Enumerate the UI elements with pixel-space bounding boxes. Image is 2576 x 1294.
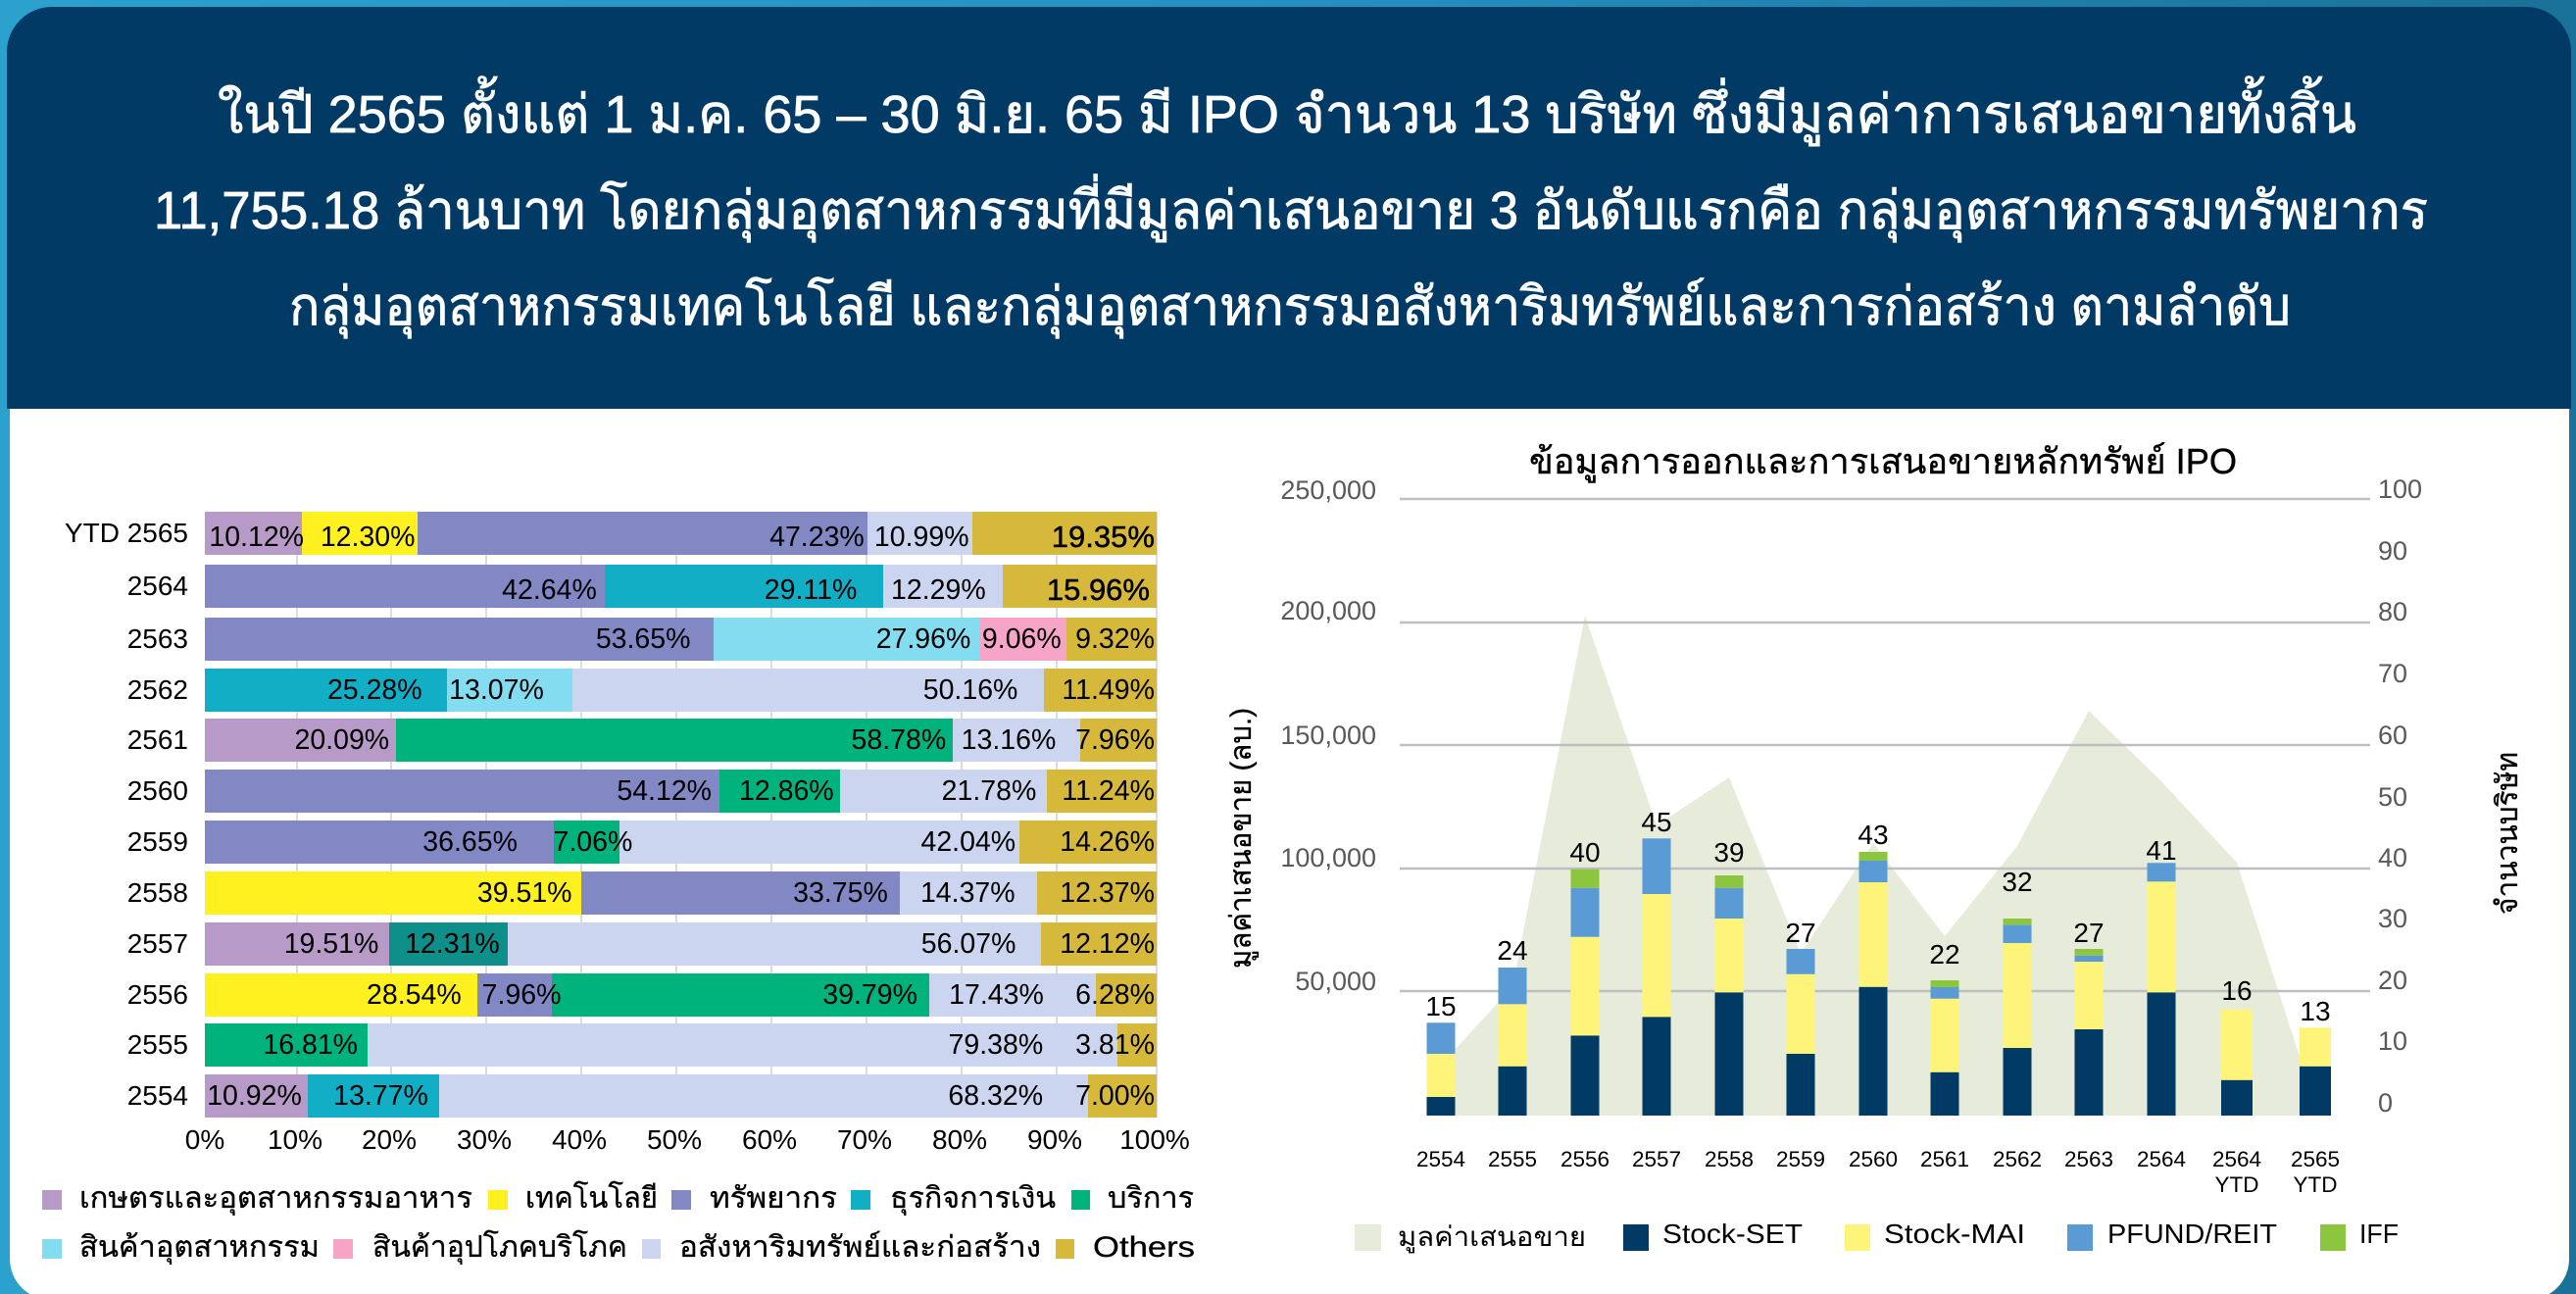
data labels: company counts: 13 xyxy=(2300,996,2331,1026)
legend: industry groups xyxy=(42,1180,1195,1266)
bar row: YTD 2565: 12.30% xyxy=(321,522,415,553)
bar row: 2556 xyxy=(127,973,1157,1017)
left axis: offering value: 100,000 xyxy=(1280,843,1376,872)
x axis: years: 2555 xyxy=(1488,1147,1537,1171)
x axis: years: 2558 xyxy=(1705,1147,1754,1171)
bar row: 2561 xyxy=(127,719,1157,762)
legend: industry groups: สินค้าอุตสาหกรรม xyxy=(79,1231,320,1266)
legend: industry groups: ทรัพยากร xyxy=(710,1182,837,1215)
right axis: number of companies xyxy=(2378,474,2422,1118)
right axis: number of companies: 10 xyxy=(2378,1026,2407,1056)
bar row: 2558 xyxy=(127,871,1157,915)
chart: stacked 100% bars by industry: 2558 xyxy=(127,877,188,908)
bar: 2554 xyxy=(1427,1022,1455,1116)
right axis: number of companies: 50 xyxy=(2378,782,2407,812)
right axis: number of companies: 90 xyxy=(2378,536,2407,566)
headline text: กลุ่มอุตสาหกรรมเทคโนโลยี และกลุ่มอุตสาหกรรมอสังหาริมทรัพย์และการก่อสร้าง ตามลำดับ xyxy=(289,276,2291,339)
data labels: company counts: 41 xyxy=(2146,835,2177,866)
bar row: 2558: 39.51% xyxy=(477,877,572,909)
x axis: percent ticks: 100% xyxy=(1119,1124,1190,1155)
bar row: YTD 2565: 19.35% xyxy=(1052,520,1155,554)
x axis: years: 2560 xyxy=(1849,1147,1898,1171)
chart: stacked 100% bars by industry: YTD 2565 xyxy=(65,518,188,548)
bar: 2559 xyxy=(1786,949,1815,1116)
chart: stacked 100% bars by industry: 2554 xyxy=(127,1080,188,1111)
x axis: percent ticks: 50% xyxy=(647,1124,702,1155)
bar row: 2564 xyxy=(127,565,1157,608)
bar row: 2558: 14.37% xyxy=(920,877,1016,909)
bar row: 2556: 28.54% xyxy=(367,979,462,1011)
left axis: offering value: 200,000 xyxy=(1280,596,1376,625)
bar row: 2563: 53.65% xyxy=(596,623,690,655)
data labels: company counts: 45 xyxy=(1641,807,1672,837)
left axis: offering value xyxy=(1280,475,1376,996)
legend: security types: Stock-SET xyxy=(1662,1219,1803,1249)
bar row: 2560: 11.24% xyxy=(1062,775,1155,807)
data labels: company counts: 43 xyxy=(1858,820,1889,850)
x axis: percent ticks: 80% xyxy=(932,1124,987,1155)
x axis: years: 2561 xyxy=(1920,1147,1969,1171)
bar row: 2558: 12.37% xyxy=(1060,877,1155,909)
right axis: number of companies: 40 xyxy=(2378,843,2407,872)
chart: stacked 100% bars by industry: 2559 xyxy=(127,826,188,857)
legend: security types: IFF xyxy=(2359,1219,2399,1249)
bar row: 2560 xyxy=(127,770,1157,813)
legend: industry groups: เทคโนโลยี xyxy=(525,1180,658,1215)
bar row: 2563 xyxy=(127,618,1157,661)
headline text: 11,755.18 ล้านบาท โดยกลุ่มอุตสาหกรรมที่มีมูลค่าเสนอขาย 3 อันดับแรกคือ กลุ่มอุตสาหกรรมทรัพยากร xyxy=(154,174,2428,243)
x axis: years: 2563 xyxy=(2064,1147,2113,1171)
chart: stacked 100% bars by industry: 2557 xyxy=(127,928,188,959)
right axis: number of companies: 80 xyxy=(2378,597,2407,626)
legend: security types: PFUND/REIT xyxy=(2107,1219,2277,1249)
panel: white content card xyxy=(10,294,2569,1294)
bar row: 2560: 54.12% xyxy=(617,775,712,807)
bar: 2564 xyxy=(2147,863,2176,1116)
bar row: 2559: 7.06% xyxy=(554,826,632,858)
data labels: company counts xyxy=(1425,807,2331,1026)
bar row: 2557: 12.31% xyxy=(405,928,500,960)
legend: industry groups: อสังหาริมทรัพย์และก่อสร้าง xyxy=(679,1230,1041,1264)
bar: 2561 xyxy=(1931,980,1958,1116)
bar row: 2562 xyxy=(127,669,1157,712)
x axis: percent ticks: 30% xyxy=(457,1124,512,1155)
bar: 2562 xyxy=(2004,919,2031,1116)
bar row: 2564: 15.96% xyxy=(1047,572,1150,607)
bar row: 2563: 27.96% xyxy=(876,623,970,655)
bar: 2565 YTD xyxy=(2300,1027,2331,1116)
chart: stacked 100% bars by industry: 2555 xyxy=(127,1029,188,1060)
bar row: YTD 2565: 10.99% xyxy=(874,522,969,553)
left axis: offering value: 150,000 xyxy=(1280,721,1376,750)
bar row: 2556: 17.43% xyxy=(949,979,1044,1011)
x axis: years: 2562 xyxy=(1993,1147,2042,1171)
bar: 2556 xyxy=(1570,870,1600,1116)
left axis title: มูลค่าเสนอขาย (ลบ.) xyxy=(1225,708,1259,969)
bar: 2555 xyxy=(1498,968,1527,1116)
bar row: 2560: 12.86% xyxy=(739,775,834,807)
bar row: 2563: 9.32% xyxy=(1075,623,1155,655)
data labels: company counts: 24 xyxy=(1497,935,1528,966)
chart: stacked 100% bars by industry: 2556 xyxy=(127,979,188,1010)
data labels: company counts: 16 xyxy=(2221,975,2253,1006)
bar row: 2559: 36.65% xyxy=(422,826,518,858)
left axis: offering value: 50,000 xyxy=(1295,967,1376,996)
x axis: years: 2564 xyxy=(2212,1147,2261,1171)
area: offering value xyxy=(1441,616,2315,1116)
bar row: 2556: 39.79% xyxy=(822,979,917,1011)
bar row: 2557: 12.12% xyxy=(1060,928,1155,960)
right axis: number of companies: 20 xyxy=(2378,966,2407,995)
x axis: percent ticks: 10% xyxy=(268,1124,322,1155)
bar: 2557 xyxy=(1643,838,1670,1116)
bar row: YTD 2565 xyxy=(65,512,1157,555)
bar row: 2554: 13.77% xyxy=(333,1080,428,1112)
bar row: 2561: 7.96% xyxy=(1075,724,1155,756)
bar row: 2564: 12.29% xyxy=(891,574,986,606)
bar row: 2555: 16.81% xyxy=(263,1029,358,1061)
bar row: 2562: 11.49% xyxy=(1062,674,1155,706)
bar row: 2564: 29.11% xyxy=(765,574,857,606)
data labels: company counts: 27 xyxy=(1785,918,1816,948)
stacked bars: securities by type xyxy=(1427,838,2331,1116)
legend: security types: มูลค่าเสนอขาย xyxy=(1398,1221,1586,1254)
left axis: offering value: 250,000 xyxy=(1280,475,1376,505)
legend: security types: Stock-MAI xyxy=(1884,1219,2025,1249)
bar: 2563 xyxy=(2074,949,2104,1116)
bar row: 2556: 6.28% xyxy=(1075,979,1155,1011)
chart: stacked 100% bars by industry: 2563 xyxy=(127,623,188,654)
x axis: percent ticks: 70% xyxy=(837,1124,892,1155)
x axis: years: 2556 xyxy=(1560,1147,1610,1171)
bar: 2558 xyxy=(1715,875,1743,1116)
right axis title: จำนวนบริษัท xyxy=(2492,752,2524,915)
bar row: 2562: 13.07% xyxy=(449,674,544,706)
right axis: number of companies: 30 xyxy=(2378,904,2407,933)
x axis: percent ticks: 60% xyxy=(742,1124,797,1155)
headline text: ในปี 2565 ตั้งแต่ 1 ม.ค. 65 – 30 มิ.ย. 65 มี IPO จำนวน 13 บริษัท ซึ่งมีมูลค่าการเสนอขายทั้งสิ้น xyxy=(218,76,2356,146)
bar row: YTD 2565: 47.23% xyxy=(769,522,865,553)
x axis: years: 2557 xyxy=(1632,1147,1681,1171)
x axis: years: 2564 xyxy=(2137,1147,2186,1171)
bar row: YTD 2565: 10.12% xyxy=(209,522,304,553)
x axis: years: 2554 xyxy=(1416,1147,1465,1171)
x axis: percent ticks: 90% xyxy=(1027,1124,1082,1155)
bar row: 2554 xyxy=(127,1074,1157,1118)
bar row: 2558: 33.75% xyxy=(793,877,888,909)
bar row: 2562: 25.28% xyxy=(327,674,422,706)
chart: stacked 100% bars by industry: 2560 xyxy=(127,775,188,806)
data labels: company counts: 15 xyxy=(1425,991,1457,1021)
bar row: 2555 xyxy=(127,1023,1157,1067)
x axis: years: YTD xyxy=(2294,1172,2337,1197)
right axis: number of companies: 100 xyxy=(2378,474,2422,504)
bar row: 2557 xyxy=(127,922,1157,966)
bar row: 2559 xyxy=(127,821,1157,864)
data labels: company counts: 22 xyxy=(1929,939,1960,970)
legend: industry groups: ธุรกิจการเงิน xyxy=(890,1182,1056,1217)
bar row: 2561: 13.16% xyxy=(962,724,1056,756)
legend: security types xyxy=(1355,1219,2399,1254)
x axis: years: 2559 xyxy=(1776,1147,1825,1171)
bar: 2564 YTD xyxy=(2221,1010,2253,1116)
bar row: 2554: 7.00% xyxy=(1075,1080,1155,1112)
bar: 2560 xyxy=(1858,852,1888,1116)
bar row: 2564: 42.64% xyxy=(502,574,597,606)
x axis: years: YTD xyxy=(2215,1172,2258,1197)
panel: dark blue header xyxy=(7,7,2571,409)
bar row: 2559: 14.26% xyxy=(1060,826,1155,858)
chart: stacked 100% bars by industry xyxy=(65,512,1158,1118)
data labels: company counts: 39 xyxy=(1713,837,1745,868)
x axis: percent ticks xyxy=(185,1124,1190,1155)
right axis: number of companies: 0 xyxy=(2378,1088,2393,1118)
legend: industry groups: เกษตรและอุตสาหกรรมอาหาร xyxy=(79,1182,472,1217)
bar row: 2557: 56.07% xyxy=(921,928,1016,960)
right axis: number of companies: 60 xyxy=(2378,721,2407,750)
chart: stacked 100% bars by industry: 2564 xyxy=(127,571,188,601)
bar row: 2561: 20.09% xyxy=(294,724,389,756)
bar row: 2562: 50.16% xyxy=(923,674,1017,706)
bar row: 2557: 19.51% xyxy=(284,928,378,960)
chart title: ข้อมูลการออกและการเสนอขายหลักทรัพย์ IPO xyxy=(1529,441,2237,483)
legend: industry groups: สินค้าอุปโภคบริโภค xyxy=(372,1229,627,1266)
bar row: 2559: 42.04% xyxy=(920,826,1016,858)
bar row: 2555: 3.81% xyxy=(1075,1029,1155,1061)
data labels: company counts: 32 xyxy=(2002,867,2033,897)
bar row: 2563: 9.06% xyxy=(982,623,1062,655)
x axis: percent ticks: 0% xyxy=(185,1124,224,1155)
right axis: number of companies: 70 xyxy=(2378,659,2407,688)
chart: stacked 100% bars by industry: 2561 xyxy=(127,724,188,755)
bar row: 2560: 21.78% xyxy=(942,775,1036,807)
bar row: 2554: 10.92% xyxy=(207,1080,302,1112)
legend: industry groups: Others xyxy=(1093,1231,1195,1264)
data labels: company counts: 40 xyxy=(1569,837,1601,868)
x axis: years: 2565 xyxy=(2291,1147,2340,1171)
data labels: company counts: 27 xyxy=(2073,918,2105,948)
chart: stacked 100% bars by industry: 2562 xyxy=(127,674,188,705)
bar row: 2561: 58.78% xyxy=(852,724,946,756)
x axis: years xyxy=(1416,1147,2340,1197)
bar row: 2555: 79.38% xyxy=(949,1029,1043,1061)
bar row: 2556: 7.96% xyxy=(482,979,561,1011)
x axis: percent ticks: 20% xyxy=(362,1124,417,1155)
legend: industry groups: บริการ xyxy=(1108,1182,1194,1215)
x axis: percent ticks: 40% xyxy=(552,1124,607,1155)
bar row: 2554: 68.32% xyxy=(948,1080,1043,1112)
